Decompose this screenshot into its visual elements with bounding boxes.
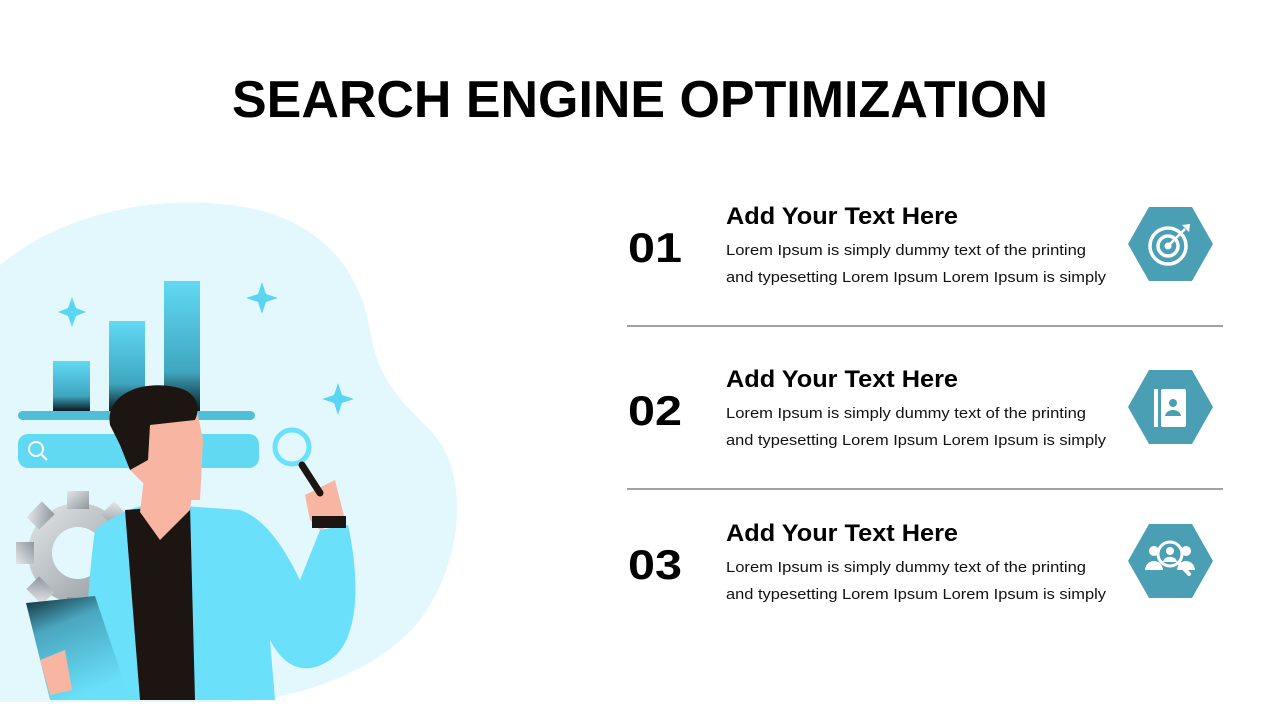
item 02 (628, 366, 1213, 449)
item 02: Add Your Text Here (726, 366, 958, 393)
item 03 (628, 520, 1213, 603)
bar chart (18, 281, 255, 420)
icon: stars (58, 282, 354, 415)
item 03: 03 (628, 541, 682, 588)
item 02: 02 (628, 387, 682, 434)
person (26, 385, 355, 700)
gear (16, 491, 130, 615)
search bar (18, 434, 259, 468)
title: SEARCH ENGINE OPTIMIZATION (232, 71, 1048, 129)
background blob (0, 202, 457, 702)
item 01: Lorem Ipsum is simply dummy text of the printing (726, 242, 1086, 259)
item 02: and typesetting Lorem Ipsum Lorem Ipsum is simply (726, 432, 1107, 449)
illustration: seo person (0, 202, 457, 702)
item 01: and typesetting Lorem Ipsum Lorem Ipsum is simply (726, 269, 1107, 286)
item 02: Lorem Ipsum is simply dummy text of the printing (726, 405, 1086, 422)
item 03: and typesetting Lorem Ipsum Lorem Ipsum is simply (726, 586, 1107, 603)
item 01: Add Your Text Here (726, 203, 958, 230)
item 01: 01 (628, 224, 682, 271)
item 03: Lorem Ipsum is simply dummy text of the printing (726, 559, 1086, 576)
icon: people search hexagon (1128, 524, 1213, 598)
item 03: Add Your Text Here (726, 520, 958, 547)
item 01 (628, 203, 1213, 286)
icon: target hexagon (1128, 207, 1213, 281)
icon: contact book hexagon (1128, 370, 1213, 444)
